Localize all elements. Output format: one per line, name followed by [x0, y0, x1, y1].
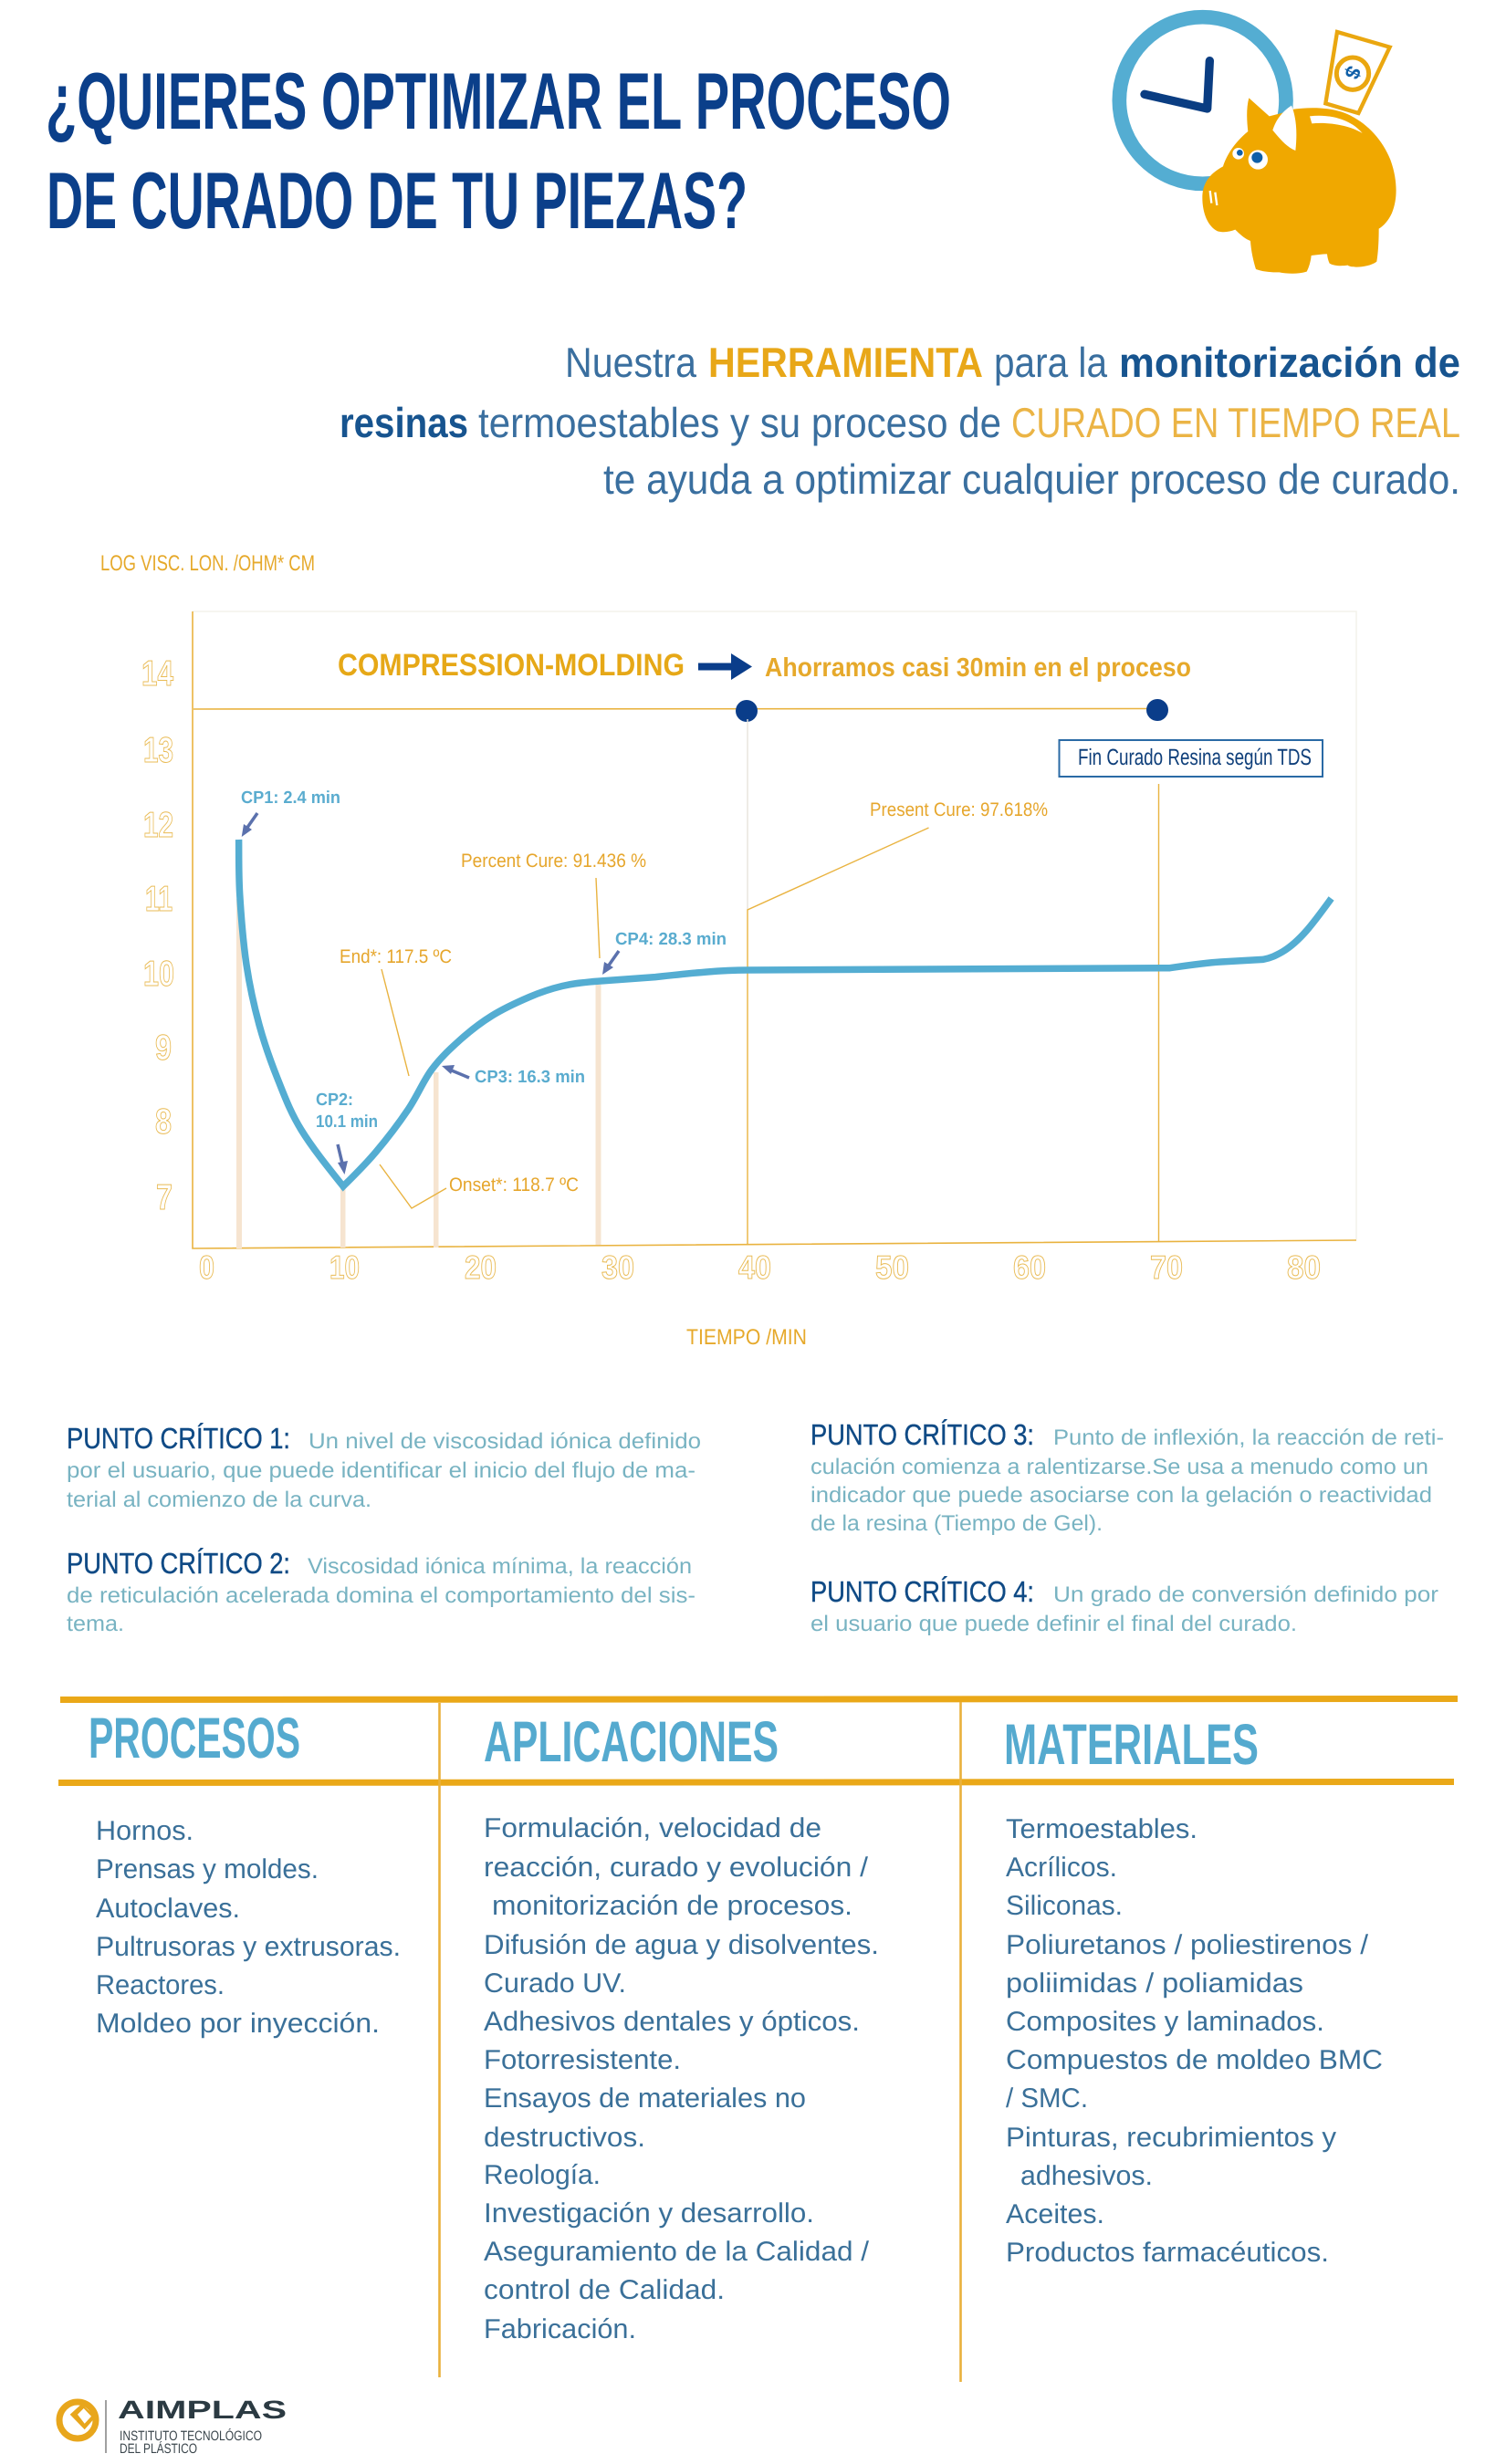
temperature and cure labels — [340, 799, 1048, 1195]
arrow: to savings — [698, 653, 752, 680]
x-axis numbers: 30 — [601, 1248, 634, 1286]
subtitle text block: para la — [994, 339, 1107, 386]
subtitle text block: termoestables y su proceso de — [478, 399, 1001, 446]
critical point labels: CP3: 16.3 min — [475, 1068, 585, 1087]
y-axis numbers: 12 — [143, 806, 173, 845]
panel: aplicaciones — [484, 1710, 879, 2344]
critical point vertical bars — [236, 899, 601, 1248]
subtitle text block: resinas — [340, 399, 468, 446]
list: aplicaciones — [484, 1813, 879, 2344]
savings callout: Ahorramos casi 30min en el proceso — [765, 653, 1191, 683]
x-axis numbers: 70 — [1150, 1248, 1183, 1286]
title: ¿QUIERES OPTIMIZAR EL PROCESO — [46, 56, 951, 146]
list: procesos: Pultrusoras y extrusoras. — [96, 1932, 401, 1962]
list: aplicaciones: monitorización de procesos. — [492, 1891, 852, 1921]
list: aplicaciones: Formulación, velocidad de — [484, 1813, 821, 1843]
list: aplicaciones: destructivos. — [484, 2123, 645, 2153]
y-axis numbers: 13 — [143, 731, 173, 770]
title — [46, 56, 951, 245]
compression-molding heading: COMPRESSION-MOLDING — [338, 648, 685, 683]
temperature and cure labels: End*: 117.5 ºC — [340, 946, 452, 967]
list: aplicaciones: Adhesivos dentales y ópticos. — [484, 2007, 860, 2037]
list: materiales: Productos farmacéuticos. — [1006, 2238, 1329, 2268]
list: aplicaciones: Investigación y desarrollo. — [484, 2198, 814, 2229]
list: materiales: Siliconas. — [1006, 1891, 1123, 1921]
panel: materiales — [1004, 1713, 1383, 2268]
list: materiales: Compuestos de moldeo BMC — [1006, 2045, 1383, 2075]
text block: punto crítico 1 — [67, 1422, 701, 1512]
x-axis numbers: 10 — [329, 1248, 360, 1286]
critical point labels — [241, 788, 727, 1132]
temperature and cure labels: Percent Cure: 91.436 % — [461, 851, 646, 872]
list: aplicaciones: Ensayos de materiales no — [484, 2083, 806, 2114]
y-axis numbers: 14 — [141, 654, 173, 694]
subtitle text block: monitorización de — [1119, 339, 1460, 386]
callout arrow heads — [242, 824, 613, 1175]
y-axis numbers: 10 — [143, 955, 174, 994]
x-axis numbers: 50 — [875, 1248, 909, 1286]
cure curve — [239, 840, 1332, 1186]
list: procesos: Autoclaves. — [96, 1894, 240, 1924]
list: procesos: Prensas y moldes. — [96, 1854, 319, 1885]
x-axis numbers: 40 — [738, 1248, 771, 1286]
text block: punto crítico 2: tema. — [67, 1612, 124, 1636]
critical point labels: 10.1 min — [316, 1112, 378, 1132]
logo: AIMPLAS — [59, 2396, 287, 2457]
list: materiales — [1006, 1814, 1383, 2268]
text block: punto crítico 3: PUNTO CRÍTICO 3: — [811, 1418, 1034, 1451]
text block: punto crítico 2 — [67, 1547, 695, 1636]
list: materiales: / SMC. — [1006, 2083, 1088, 2114]
list: procesos: Reactores. — [96, 1970, 225, 2000]
list: materiales: Pinturas, recubrimientos y — [1006, 2123, 1336, 2153]
list: aplicaciones: control de Calidad. — [484, 2275, 725, 2305]
y-axis numbers — [141, 654, 174, 1217]
text block: punto crítico 2: Viscosidad iónica mínima, la reacción — [308, 1554, 692, 1579]
chart: curing curve — [141, 611, 1356, 1350]
critical point labels: CP1: 2.4 min — [241, 788, 340, 808]
text block: punto crítico 1: terial al comienzo de la curva. — [67, 1488, 371, 1512]
list: aplicaciones: Fotorresistente. — [484, 2045, 681, 2075]
panel: procesos — [89, 1707, 401, 2039]
text block: punto crítico 1: por el usuario, que puede identificar el inicio del flujo de ma- — [67, 1458, 695, 1483]
title: DE CURADO DE TU PIEZAS? — [47, 155, 748, 245]
subtitle text block: HERRAMIENTA — [708, 339, 983, 386]
y-axis numbers: 7 — [156, 1178, 173, 1217]
logo tagline: INSTITUTO TECNOLÓGICO — [120, 2427, 262, 2444]
logo wordmark: AIMPLAS — [118, 2396, 287, 2424]
list: aplicaciones: reacción, curado y evolución / — [484, 1853, 869, 1883]
text block: punto crítico 3: indicador que puede asociarse con la gelación o reactividad — [811, 1483, 1432, 1508]
x-axis numbers: 20 — [465, 1248, 497, 1286]
x-axis numbers: 0 — [199, 1248, 214, 1286]
logo tagline — [120, 2427, 262, 2457]
icon: banknote: $ — [1340, 63, 1365, 83]
list: procesos: Moldeo por inyección. — [96, 2009, 380, 2039]
icon: logo mark — [59, 2402, 96, 2438]
critical point labels: CP2: — [316, 1091, 353, 1110]
subtitle text block — [340, 339, 1460, 503]
x-axis numbers: 60 — [1013, 1248, 1046, 1286]
y-axis title: LOG VISC. LON. /OHM* CM — [100, 551, 315, 576]
x-axis numbers — [199, 1248, 1321, 1286]
list: aplicaciones: Aseguramiento de la Calidad / — [484, 2237, 870, 2267]
text block: punto crítico 1: PUNTO CRÍTICO 1: — [67, 1422, 290, 1455]
guide lines — [380, 719, 1159, 1244]
list: materiales: Poliuretanos / poliestirenos / — [1006, 1930, 1369, 1960]
text block: punto crítico 1: Un nivel de viscosidad iónica definido — [309, 1429, 701, 1454]
time saved line with markers — [193, 699, 1168, 722]
heading: aplicaciones: APLICACIONES — [484, 1710, 779, 1774]
text block: punto crítico 4: PUNTO CRÍTICO 4: — [811, 1575, 1034, 1608]
x-axis title: TIEMPO /MIN — [686, 1325, 807, 1350]
icon: piggy body — [1202, 98, 1396, 274]
subtitle text block: Nuestra — [565, 339, 696, 386]
text block: punto crítico 3: Punto de inflexión, la reacción de reti- — [1053, 1425, 1444, 1450]
list: materiales: Composites y laminados. — [1006, 2007, 1324, 2037]
temperature and cure labels: Present Cure: 97.618% — [870, 799, 1048, 820]
end of cure box: Fin Curado Resina según TDS — [1078, 745, 1312, 770]
list: procesos — [96, 1816, 401, 2039]
x-axis numbers: 80 — [1287, 1248, 1321, 1286]
text block: punto crítico 4: el usuario que puede definir el final del curado. — [811, 1612, 1297, 1636]
logo tagline: DEL PLÁSTICO — [120, 2440, 197, 2457]
critical point labels: CP4: 28.3 min — [615, 930, 727, 949]
text block: punto crítico 4: Un grado de conversión definido por — [1053, 1582, 1438, 1607]
end of cure box — [1059, 740, 1323, 777]
y-axis numbers: 9 — [155, 1028, 172, 1068]
text block: punto crítico 3: de la resina (Tiempo de Gel). — [811, 1511, 1103, 1536]
y-axis numbers: 11 — [145, 880, 173, 919]
icon: clock — [1119, 17, 1286, 183]
list: aplicaciones: Curado UV. — [484, 1968, 626, 1999]
text block: punto crítico 2: PUNTO CRÍTICO 2: — [67, 1547, 290, 1580]
text block: punto crítico 3 — [811, 1418, 1444, 1536]
icon: clock and piggy bank — [1119, 17, 1396, 274]
list: materiales: Termoestables. — [1006, 1814, 1197, 1844]
list: materiales: Acrílicos. — [1006, 1853, 1117, 1883]
list: materiales: Aceites. — [1006, 2199, 1104, 2229]
list: aplicaciones: Reología. — [484, 2160, 601, 2190]
heading: procesos: PROCESOS — [89, 1707, 300, 1770]
list: materiales: adhesivos. — [1020, 2161, 1153, 2191]
list: aplicaciones: Fabricación. — [484, 2314, 636, 2344]
list: procesos: Hornos. — [96, 1816, 193, 1846]
callout arrows — [245, 813, 619, 1167]
text block: punto crítico 3: culación comienza a ralentizarse.Se usa a menudo como un — [811, 1455, 1428, 1479]
chart frame — [193, 611, 1356, 1248]
text block: punto crítico 4 — [811, 1575, 1438, 1636]
table rules — [58, 1696, 1458, 2382]
text block: punto crítico 2: de reticulación acelerada domina el comportamiento del sis- — [67, 1583, 695, 1608]
temperature and cure labels: Onset*: 118.7 ºC — [449, 1175, 579, 1195]
list: materiales: poliimidas / poliamidas — [1006, 1968, 1303, 1999]
icon: banknote — [1325, 32, 1390, 113]
list: aplicaciones: Difusión de agua y disolventes. — [484, 1930, 879, 1960]
y-axis numbers: 8 — [155, 1102, 172, 1142]
heading: materiales: MATERIALES — [1004, 1713, 1259, 1777]
